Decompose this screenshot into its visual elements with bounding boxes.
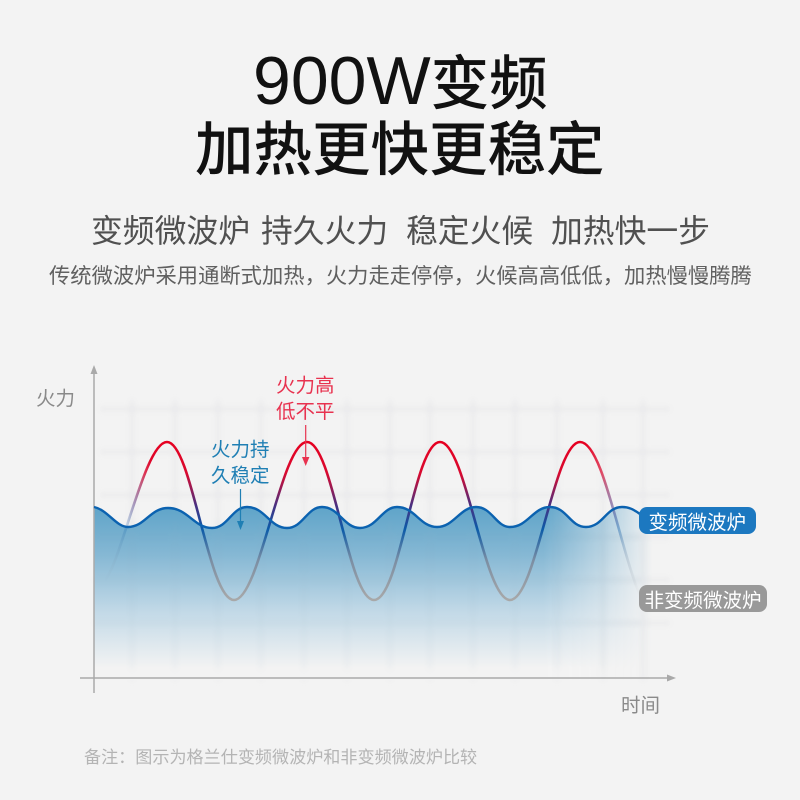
title [195, 43, 605, 183]
callout: stable: 火力持 [211, 439, 270, 461]
subtitle [91, 213, 710, 249]
title line 2: 加热更快更稳定 [195, 118, 605, 183]
chart [37, 365, 767, 714]
y axis [90, 365, 98, 693]
subtitle: 变频微波炉 [91, 213, 250, 249]
label: non-inverter microwave: 非变频微波炉 [644, 590, 762, 612]
blue area fill [94, 508, 646, 658]
label: inverter microwave [639, 507, 756, 534]
x axis [80, 674, 676, 682]
callout: stable: 久稳定 [211, 465, 270, 487]
background grid [100, 400, 670, 680]
subtitle: 持久火力 [261, 213, 388, 249]
callout: high and low [276, 375, 335, 466]
callout: stable [211, 439, 270, 530]
y axis label: 火力 [36, 388, 75, 410]
subtitle: 稳定火候 [406, 213, 533, 249]
description text: 传统微波炉采用通断式加热，火力走走停停，火候高高低低，加热慢慢腾腾 [49, 264, 752, 288]
grid over fill [94, 520, 640, 670]
title line 1: 900W变频 [253, 43, 548, 119]
inverter wave line [94, 507, 640, 528]
callout: high and low: 低不平 [276, 401, 335, 423]
label: inverter microwave: 变频微波炉 [648, 512, 746, 534]
callout: high and low: 火力高 [276, 375, 335, 397]
subtitle: 加热快一步 [551, 213, 710, 249]
footnote: 备注：图示为格兰仕变频微波炉和非变频微波炉比较 [84, 748, 477, 767]
non-inverter wave line [105, 442, 640, 600]
x axis label: 时间 [621, 695, 660, 717]
